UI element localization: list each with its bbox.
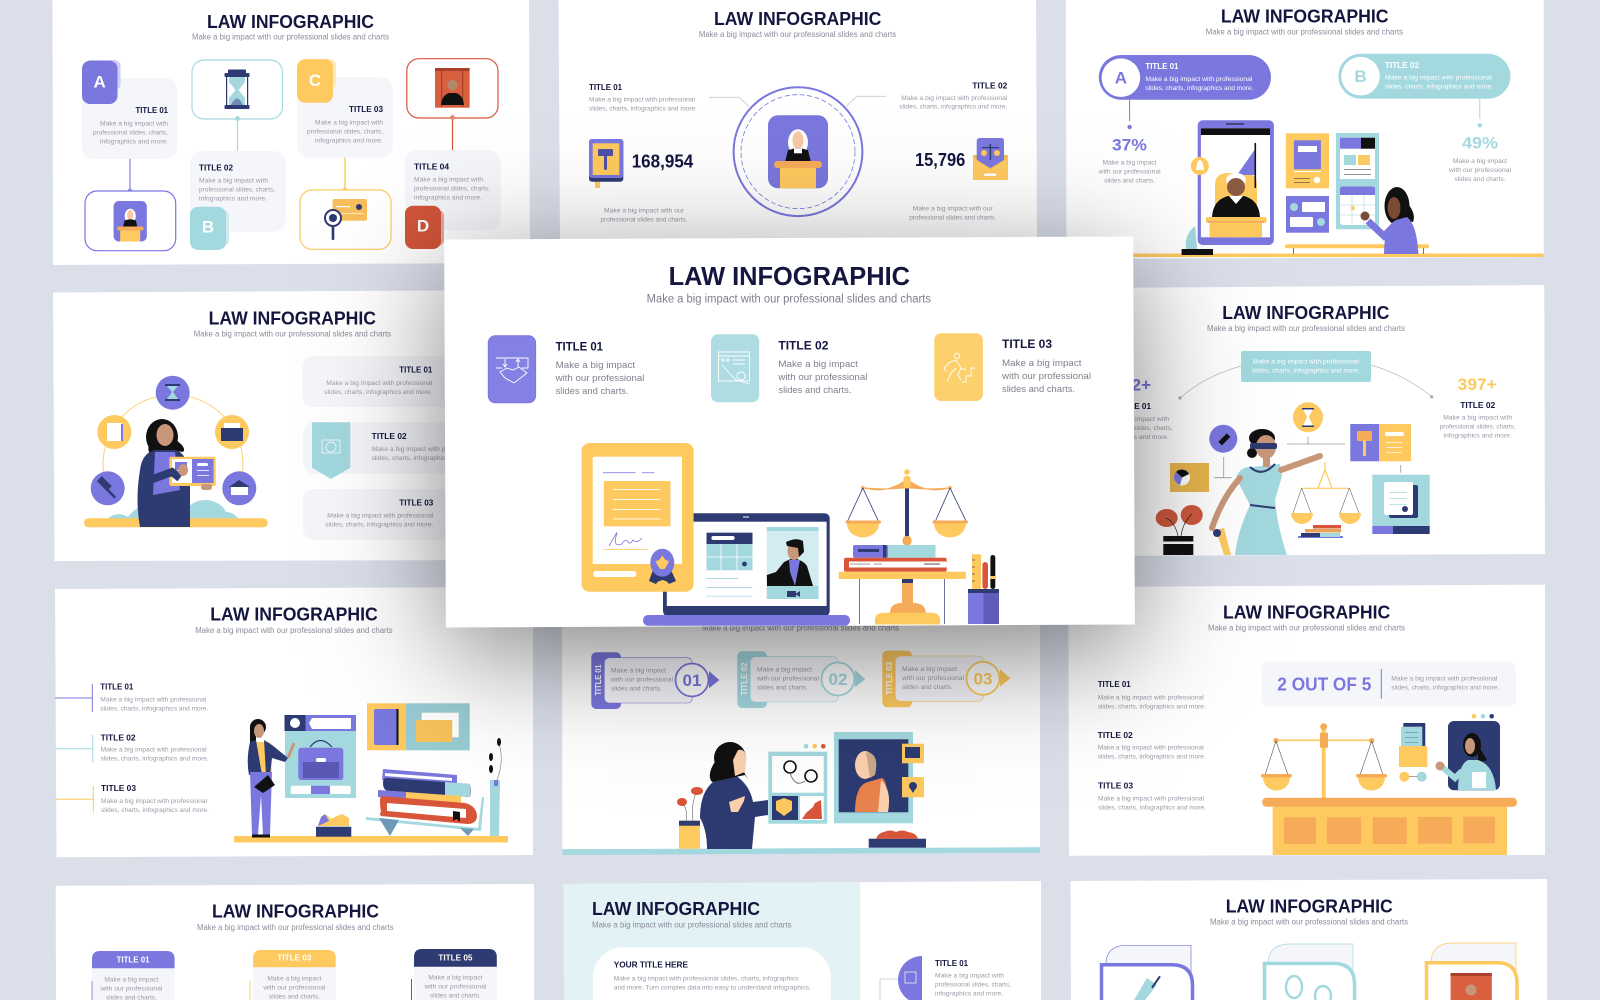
stat: 49%: slides and charts.	[1454, 176, 1506, 183]
card: title 03: TITLE 03	[399, 497, 434, 507]
text: right caption: Make a big impact with our	[913, 206, 993, 213]
card: title 02 with ribbon: slides, charts, infographics and more.	[372, 455, 480, 462]
list item: title 01: TITLE 01	[100, 681, 134, 691]
icon box: magnifier	[300, 190, 391, 249]
frame: magnifier	[1264, 944, 1354, 1000]
heading: slide 9 title: LAW INFOGRAPHIC	[212, 901, 379, 922]
panel: slide 8 scales and counter	[1068, 585, 1545, 856]
stat: 49%: Make a big impact	[1453, 158, 1507, 165]
flow item 01: slides and charts.	[611, 686, 662, 693]
ground line	[1066, 254, 1544, 257]
list item: title 02	[55, 732, 209, 763]
card C: TITLE 03	[349, 104, 383, 114]
callout: 2 out of 5: Make a big impact with professional	[1391, 676, 1498, 683]
feature: title 03: with our professional	[1001, 371, 1091, 382]
flow item 02: TITLE 02	[739, 662, 749, 696]
subtitle: slide 6: Make a big impact with our professional slides and charts	[195, 626, 393, 635]
callout: 2 out of 5: 2 OUT OF 5	[1277, 674, 1371, 694]
list item: title 03: TITLE 03	[1098, 781, 1133, 791]
subtitle: slide 8: Make a big impact with our professional slides and charts	[1208, 624, 1405, 633]
list item: title 02: Make a big impact with professional	[101, 747, 207, 754]
card B: professional slides, charts,	[199, 187, 275, 194]
column: title 01: Make a big impact	[104, 977, 159, 984]
column: title 03: with our professional	[262, 985, 326, 992]
list item: title 01	[55, 681, 208, 712]
flow item 03: TITLE 03	[884, 661, 894, 695]
stat: 37%: 37%	[1112, 136, 1147, 155]
card D: professional slides, charts,	[414, 186, 490, 193]
text: title 02 block: slides, charts, infographics and more.	[899, 104, 1007, 111]
card C	[297, 59, 393, 158]
icon: scales envelope	[973, 138, 1008, 180]
panel: slide 9 column tabs	[56, 884, 534, 1000]
subtitle: slide 1: Make a big impact with our professional slides and charts	[192, 33, 389, 42]
feature: title 03: slides and charts.	[1002, 384, 1075, 395]
subtitle: slide 9: Make a big impact with our professional slides and charts	[197, 923, 394, 932]
list item: title 01	[1098, 679, 1206, 710]
card C: Make a big impact with	[315, 119, 383, 126]
card: title 03: Make a big impact with professional	[327, 513, 434, 520]
stat: 49%	[1448, 134, 1511, 183]
list item: title 02	[1098, 730, 1206, 761]
text: title 01 block: TITLE 01	[589, 82, 622, 92]
subtitle: slide 4: Make a big impact with our professional slides and charts	[194, 330, 391, 339]
callout: your title here: and more. Turn complex data into easy to understand infographics.	[614, 984, 811, 991]
pill B: slides, charts, infographics and more.	[1385, 84, 1493, 91]
ground line	[562, 847, 1040, 855]
icon: presentation board	[718, 352, 750, 384]
card: title 01	[302, 356, 492, 407]
subtitle: slide 2: Make a big impact with our professional slides and charts	[699, 30, 896, 39]
flow item 01: Make a big impact	[611, 668, 666, 675]
text: title 02 block	[899, 80, 1008, 111]
subtitle: slide 5: Make a big impact with our professional slides and charts	[1207, 324, 1405, 333]
illustration: certificate tablet	[582, 443, 694, 592]
heading: main title: LAW INFOGRAPHIC	[669, 263, 910, 291]
panel: slide 3 pills and phone	[1066, 0, 1544, 259]
column: title 03: Make a big impact	[267, 976, 322, 983]
stat: left partially hidden: infographics and more.	[1101, 434, 1169, 441]
list item: title 02: slides, charts, infographics and more.	[101, 756, 209, 763]
column: title 05: TITLE 05	[438, 952, 473, 962]
list item: title 03: Make a big impact with professional	[1098, 795, 1204, 802]
chart: circle with judge	[734, 87, 862, 216]
heading: slide 11 title: LAW INFOGRAPHIC	[1226, 895, 1393, 916]
column: title 05: slides and charts.	[430, 993, 481, 1000]
connector: right arc	[1371, 365, 1433, 398]
stat: 168,954: 168,954	[632, 152, 693, 172]
stat: 37%: Make a big impact	[1103, 160, 1157, 167]
card: title 03	[303, 489, 493, 540]
illustration: app panels	[1285, 133, 1429, 254]
heading: slide 1 title: LAW INFOGRAPHIC	[207, 11, 374, 32]
feature: title 02: Make a big impact	[778, 359, 858, 370]
frame: prisoner	[1426, 943, 1517, 1000]
column: title 03: TITLE 03	[277, 953, 312, 963]
stat: 49%: with our professional	[1448, 167, 1511, 174]
stat: 397+: infographics and more.	[1444, 432, 1512, 439]
panel: slide 7 arrows and handcuffs	[562, 600, 1040, 855]
card: title 02 with ribbon	[303, 422, 493, 479]
icon: handshake	[496, 358, 528, 383]
icon box: judge	[85, 191, 176, 251]
pill B	[1338, 54, 1510, 99]
illustration: evidence scene	[677, 732, 926, 849]
item: title 01 with half circle: Make a big impact with	[935, 972, 1004, 979]
text: left caption	[600, 207, 688, 223]
heading: slide 2 title: LAW INFOGRAPHIC	[714, 8, 881, 29]
illustration: woman pointing	[1360, 187, 1418, 254]
stat: 397+: professional slides, charts,	[1440, 423, 1516, 430]
pill B: B	[1354, 67, 1367, 86]
list item: title 02: TITLE 02	[1098, 730, 1133, 740]
card: title 02 with ribbon: Make a big impact with professional	[372, 446, 478, 453]
feature: title 03: Make a big impact	[1002, 358, 1082, 369]
feature: title 02	[711, 334, 867, 402]
card D: D	[417, 217, 429, 236]
callout: your title here: Make a big impact with professional slides, charts, infographics	[614, 976, 799, 983]
card D	[405, 150, 501, 249]
text: title 01 block	[589, 82, 697, 113]
flow item 01: with our professional	[610, 677, 673, 684]
stat: 397+: Make a big impact with	[1443, 414, 1512, 421]
icon box: prisoner	[407, 59, 498, 118]
text: left caption: Make a big impact with our	[604, 207, 685, 214]
feature: title 02: slides and charts.	[778, 385, 851, 396]
callout: 2 out of 5: slides, charts, infographics and more.	[1391, 685, 1499, 692]
column: title 01: TITLE 01	[116, 954, 150, 964]
column: title 05: with our professional	[423, 984, 487, 991]
card: title 01: Make a big impact with professional	[326, 380, 433, 387]
panel: slide 11 framed icons	[1070, 879, 1547, 1000]
callout: your title here: YOUR TITLE HERE	[614, 960, 688, 970]
stat: left partially hidden	[1097, 376, 1173, 441]
list item: title 01: TITLE 01	[1098, 679, 1131, 689]
connector: left arc	[1178, 366, 1241, 400]
heading: slide 8 title: LAW INFOGRAPHIC	[1223, 602, 1390, 623]
connector: prisoner to D	[450, 115, 455, 150]
subtitle: slide 11: Make a big impact with our professional slides and charts	[1210, 917, 1408, 926]
stat: 397+: 397+	[1458, 375, 1497, 394]
icon: gavel book	[589, 139, 623, 188]
list item: title 03: slides, charts, infographics and more.	[101, 807, 209, 814]
card D: infographics and more.	[414, 195, 482, 202]
flow item 03: Make a big impact	[902, 666, 957, 673]
flow item 01: TITLE 01	[593, 664, 603, 696]
illustration: office scene	[234, 703, 508, 842]
card B: TITLE 02	[199, 163, 233, 173]
feature: title 01: slides and charts.	[556, 386, 629, 397]
list item: title 01: slides, charts, infographics and more.	[100, 705, 208, 712]
stat: 15,796: 15,796	[915, 150, 965, 170]
card B: B	[202, 218, 214, 237]
card B: Make a big impact with	[199, 178, 268, 185]
heading: slide 10 title: LAW INFOGRAPHIC	[592, 898, 760, 919]
flow item 03: with our professional	[901, 675, 964, 682]
callout: teal box: slides, charts, infographics and more.	[1252, 367, 1360, 374]
feature: title 03	[934, 333, 1091, 401]
feature: title 02: with our professional	[777, 372, 867, 383]
connector: C to magnifier	[342, 158, 348, 192]
list item: title 02: Make a big impact with professional	[1098, 745, 1204, 752]
item: title 01 with half circle: professional slides, charts,	[935, 981, 1011, 988]
card B	[190, 151, 286, 250]
panel: slide 2 judge circle statistics	[558, 0, 1037, 242]
text: right caption	[909, 206, 996, 222]
list item: title 02: slides, charts, infographics and more.	[1098, 754, 1206, 761]
pill B: TITLE 02	[1385, 60, 1419, 70]
pill A	[1099, 55, 1271, 100]
feature: title 02: TITLE 02	[778, 338, 829, 352]
icon box: hourglass	[192, 60, 282, 119]
stat: 37%: slides and charts.	[1104, 178, 1155, 185]
connector: right leader	[846, 96, 886, 107]
heading: slide 6 title: LAW INFOGRAPHIC	[210, 604, 378, 625]
pill A: slides, charts, infographics and more.	[1145, 85, 1253, 92]
card: title 01: TITLE 01	[399, 365, 433, 375]
list item: title 03: TITLE 03	[101, 783, 136, 793]
feature: title 01	[488, 336, 644, 403]
pill A: Make a big impact with professional	[1145, 76, 1253, 83]
card D: TITLE 04	[414, 161, 449, 171]
illustration: woman with icon arc	[84, 376, 268, 527]
illustration: counter	[1262, 798, 1517, 855]
flow item 03: slides and charts.	[902, 684, 953, 691]
text: right caption: professional slides and charts.	[909, 215, 996, 222]
heading: slide 4 title: LAW INFOGRAPHIC	[209, 307, 376, 328]
callout: your title here	[593, 947, 831, 1000]
item: title 01 with half circle: infographics and more.	[935, 990, 1003, 997]
subtitle: slide 3: Make a big impact with our professional slides and charts	[1206, 27, 1403, 36]
item: title 01 with half circle	[880, 956, 1011, 1000]
column: title 01	[92, 951, 175, 1000]
stat: left partially hidden: TITLE 01	[1117, 401, 1151, 411]
panel: slide 1 lettered cards	[52, 0, 530, 265]
illustration: pencil holder	[968, 554, 999, 624]
feature: title 01: TITLE 01	[556, 340, 603, 354]
feature: title 03: TITLE 03	[1002, 337, 1052, 351]
callout: 2 out of 5	[1262, 662, 1516, 707]
flow item 01	[591, 652, 719, 709]
stat: left partially hidden: Make a big impact with	[1100, 416, 1169, 423]
illustration: scale	[1261, 723, 1387, 798]
stat: left partially hidden: 152+	[1113, 376, 1151, 395]
card A: Make a big impact with	[100, 120, 168, 128]
connector: pill A	[1127, 100, 1132, 129]
column: title 05: Make a big impact	[428, 975, 483, 982]
illustration: documents and assistant	[1399, 714, 1500, 790]
feature: title 01: Make a big impact	[556, 360, 635, 371]
card A: infographics and more.	[100, 138, 168, 146]
panel: slide 10 split teal	[564, 881, 1041, 1000]
flow item 03: 03	[974, 669, 992, 688]
card A: professional slides, charts,	[93, 130, 168, 136]
feature: title 01: with our professional	[555, 373, 644, 384]
text: title 02 block: TITLE 02	[972, 80, 1008, 90]
list item: title 01: Make a big impact with professional	[1098, 694, 1204, 701]
pill A: TITLE 01	[1145, 61, 1179, 71]
card: title 01: slides, charts, infographics and more.	[324, 389, 432, 396]
flow item 01: 01	[683, 671, 701, 690]
card A	[82, 60, 178, 159]
card C: C	[309, 71, 321, 90]
item: title 01 with half circle: TITLE 01	[935, 958, 968, 968]
subtitle: slide 7: Make a big impact with our professional slides and charts	[702, 624, 899, 633]
card A: A	[94, 73, 106, 92]
flow item 02: slides and charts.	[757, 685, 808, 692]
list item: title 02: TITLE 02	[101, 732, 136, 742]
stat: left partially hidden: professional slides, charts,	[1097, 425, 1173, 432]
subtitle: slide 10: Make a big impact with our professional slides and charts	[592, 920, 792, 929]
connector: A to judge icon	[127, 159, 133, 194]
connector: pill B	[1478, 99, 1482, 128]
text: title 01 block: Make a big impact with professional	[589, 97, 695, 104]
flow item 02: Make a big impact	[757, 667, 812, 674]
callout: teal box: Make a big impact with professional	[1253, 358, 1359, 365]
column: title 03	[250, 950, 336, 1000]
card A: TITLE 01	[136, 105, 168, 115]
text: title 02 block: Make a big impact with professional	[901, 95, 1008, 102]
panel: slide 6 woman with briefcase	[55, 587, 533, 857]
card: title 03: slides, charts, infographics and more.	[325, 522, 433, 529]
column: title 01: with our professional	[99, 986, 163, 993]
callout: teal box	[1241, 351, 1371, 382]
panel: center featured slide	[444, 236, 1135, 628]
list item: title 01: Make a big impact with professional	[100, 696, 207, 703]
icon: climbing stairs	[944, 353, 975, 382]
flow item 02: with our professional	[756, 676, 819, 683]
panel: slide 4 woman with tablet	[53, 290, 540, 561]
flow item 03	[882, 651, 1010, 707]
connector: left leader	[709, 97, 749, 107]
card: title 02 with ribbon: TITLE 02	[372, 431, 407, 441]
pill A: A	[1115, 69, 1127, 88]
column: title 05	[412, 949, 497, 1000]
card C: infographics and more.	[315, 137, 383, 144]
illustration: scales and books	[839, 469, 968, 624]
subtitle: main: Make a big impact with our professional slides and charts	[647, 294, 931, 306]
connector: hourglass to B	[235, 116, 240, 151]
stat: 397+: TITLE 02	[1460, 400, 1496, 410]
list item: title 01: slides, charts, infographics and more.	[1098, 703, 1206, 710]
text: left caption: professional slides and charts.	[600, 216, 688, 223]
frame: gavel	[1102, 945, 1192, 1000]
list item: title 03: slides, charts, infographics and more.	[1098, 804, 1206, 811]
illustration: laptop with video call	[643, 513, 850, 626]
panel: slide 5 lady justice	[1080, 285, 1545, 556]
illustration: justice scene	[1156, 402, 1430, 555]
list item: title 03	[56, 783, 209, 814]
card B: infographics and more.	[199, 196, 267, 203]
list item: title 03: Make a big impact with professional	[101, 798, 207, 805]
card C: professional slides, charts,	[307, 128, 383, 135]
heading: slide 5 title: LAW INFOGRAPHIC	[1222, 302, 1389, 323]
card D: Make a big impact with	[414, 177, 483, 184]
heading: slide 3 title: LAW INFOGRAPHIC	[1221, 6, 1389, 27]
stat: 397+	[1440, 375, 1516, 439]
stat: 49%: 49%	[1462, 134, 1498, 153]
list item: title 03	[1098, 781, 1206, 811]
stat: 37%	[1098, 136, 1161, 185]
flow item 02: 02	[829, 670, 847, 689]
stat: 37%: with our professional	[1098, 169, 1161, 176]
pill B: Make a big impact with professional	[1385, 75, 1492, 82]
flow item 02	[737, 651, 865, 708]
text: title 01 block: slides, charts, infographics and more.	[589, 106, 697, 113]
illustration: phone with judge	[1182, 120, 1274, 255]
